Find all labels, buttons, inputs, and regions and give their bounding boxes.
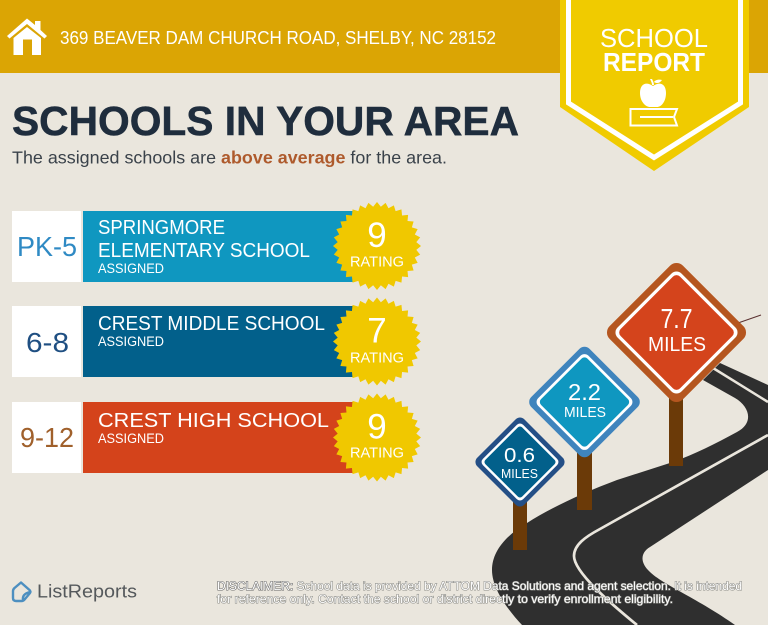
rating badge 7: RATING (350, 350, 404, 366)
sign: 7.7 miles: 7.7 (660, 303, 692, 334)
rating badge 9: RATING (350, 254, 404, 270)
rating badge 7 (333, 298, 421, 386)
sign: 2.2 miles (526, 344, 643, 510)
school bar: SPRINGMORE (98, 217, 225, 239)
icon: apple on books (630, 79, 677, 126)
icon: logo house (13, 582, 30, 601)
rating badge 9: RATING (350, 444, 404, 462)
school bar (83, 306, 355, 377)
grade box 9-12 (12, 402, 81, 473)
sign: 0.6 miles (473, 415, 567, 550)
row: high school (12, 394, 421, 482)
grade box PK-5: PK-5 (17, 231, 77, 262)
badge: school report (560, 0, 749, 171)
rating badge 9: 9 (367, 216, 387, 255)
sign: 7.7 miles: MILES (648, 334, 706, 356)
icon: house (7, 18, 47, 55)
rating badge 9: 9 (367, 408, 387, 446)
badge: school report: SCHOOL (600, 23, 708, 53)
sign: 0.6 miles: MILES (501, 467, 538, 481)
school bar: ASSIGNED (98, 334, 164, 349)
address: 369 BEAVER DAM CHURCH ROAD, SHELBY, NC 28152 (60, 28, 496, 48)
grade box 6-8 (12, 306, 81, 377)
sign: 2.2 miles: 2.2 (568, 379, 601, 405)
road illustration (492, 315, 768, 625)
rating badge 9 (333, 202, 421, 290)
logo: ListReports: ListReports (37, 580, 137, 601)
rating badge 9 (333, 394, 421, 482)
sign: 7.7 miles (603, 259, 750, 466)
title: SCHOOLS IN YOUR AREA (12, 98, 519, 144)
sign: 0.6 miles: 0.6 (504, 445, 535, 467)
disclaimer: DISCLAIMER: School data is provided by ATTOM Data Solutions and agent selection. It is intended (217, 579, 742, 593)
school bar (83, 402, 355, 473)
school bar: ASSIGNED (98, 431, 164, 446)
grade box 9-12: 9-12 (20, 422, 74, 453)
grade box 6-8: 6-8 (26, 327, 69, 358)
school bar: CREST HIGH SCHOOL (98, 410, 329, 432)
row: middle school (12, 298, 421, 386)
rating badge 7: 7 (367, 312, 387, 350)
sign: 2.2 miles: MILES (564, 404, 606, 421)
disclaimer: for reference only. Contact the school or district directly to verify enrollment eligibility. (217, 592, 673, 606)
school bar (83, 211, 355, 282)
school bar: ELEMENTARY SCHOOL (98, 240, 310, 262)
school bar: CREST MIDDLE SCHOOL (98, 313, 325, 335)
header band (0, 0, 768, 73)
disclaimer (217, 579, 742, 606)
subtitle: The assigned schools are above average for the area. (12, 147, 447, 167)
school bar: ASSIGNED (98, 261, 164, 276)
row: elementary school (12, 202, 421, 290)
badge: school report: REPORT (603, 47, 705, 77)
grade box PK-5 (12, 211, 81, 282)
